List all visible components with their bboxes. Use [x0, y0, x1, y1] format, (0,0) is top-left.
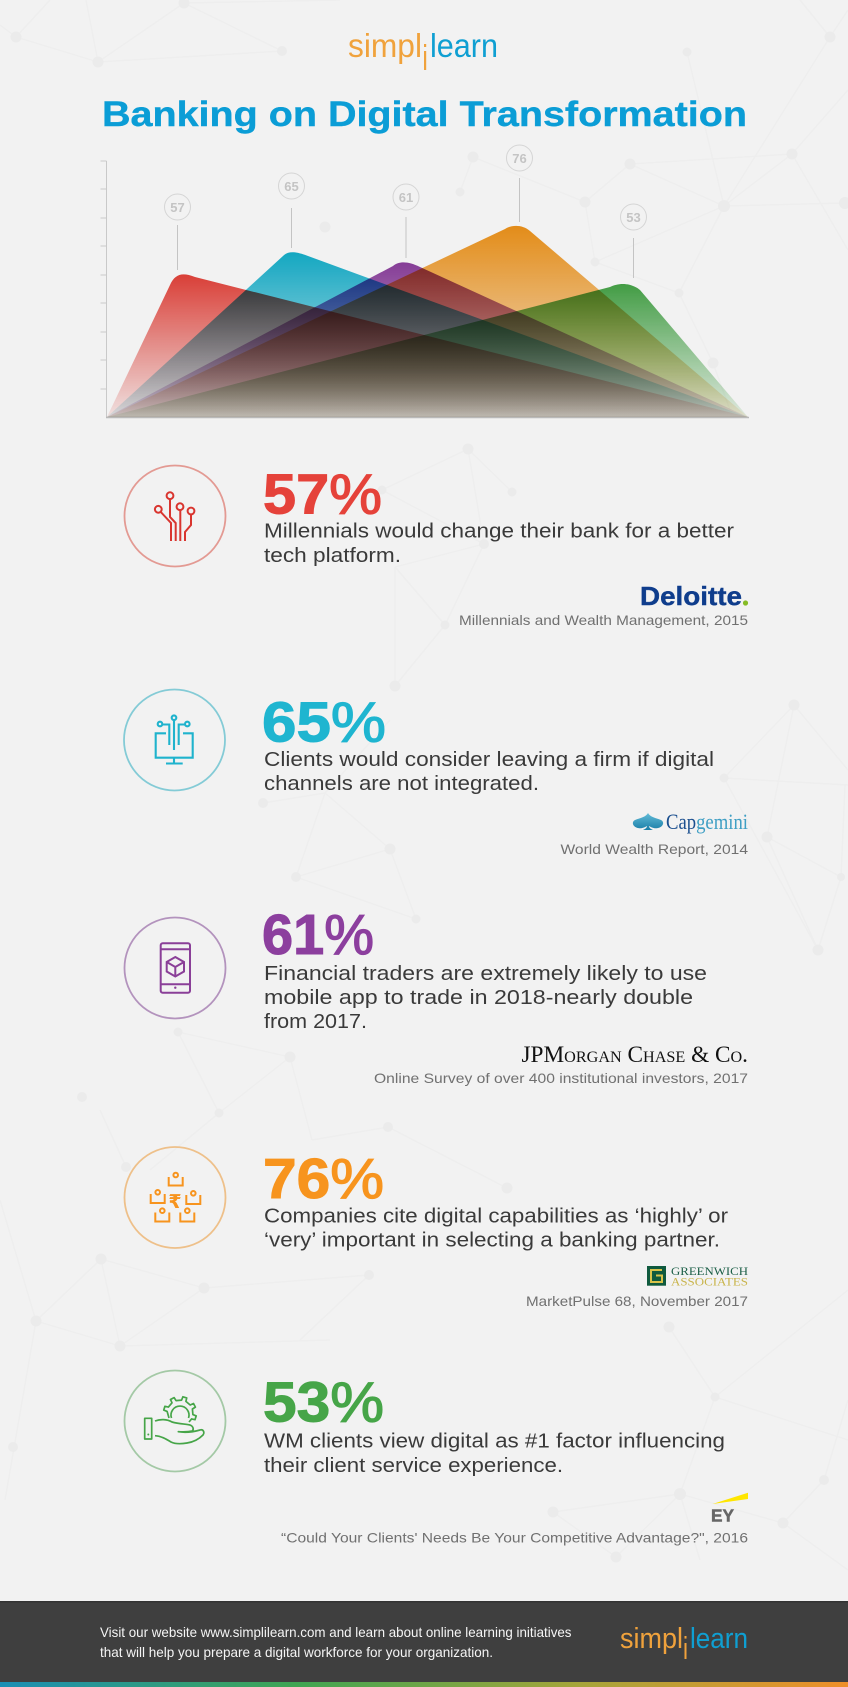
logo: Deloitte: Deloitte: [640, 581, 742, 611]
stat value: 61%: [262, 903, 374, 967]
footer gradient strip: [0, 1682, 848, 1687]
logo: Greenwich Associates: [647, 1264, 748, 1288]
footer text: [100, 1624, 572, 1660]
description: [264, 1206, 728, 1252]
icon: circuit in circle: [124, 466, 226, 566]
source: “Could Your Clients' Needs Be Your Competitive Advantage?", 2016: [281, 1530, 748, 1546]
icon: people around rupee: [124, 1147, 226, 1248]
panel: 65 percent stat: [124, 690, 748, 857]
description: [264, 1430, 725, 1477]
footer text: Visit our website www.simplilearn.com and learn about online learning initiatives: [100, 1624, 572, 1640]
description: tech platform.: [264, 545, 401, 567]
description: Clients would consider leaving a firm if digital: [264, 749, 714, 771]
stat value: 76%: [263, 1147, 384, 1211]
series: 65 cyan: [107, 252, 748, 417]
logo: simplilearn header: simpl: [348, 27, 422, 64]
panel: 53 percent stat: [124, 1370, 748, 1546]
panel: 61 percent stat: [124, 903, 748, 1086]
description: their client service experience.: [264, 1455, 563, 1477]
source: World Wealth Report, 2014: [560, 841, 748, 857]
panel: 57 percent stat: [124, 462, 748, 628]
footer: [0, 1601, 848, 1687]
series: 57 red: [107, 274, 748, 417]
data label: 57: [164, 194, 190, 270]
description: mobile app to trade in 2018-nearly double: [264, 987, 693, 1009]
description: channels are not integrated.: [264, 773, 539, 795]
series: 76 orange: [107, 226, 748, 417]
description: Financial traders are extremely likely to use: [264, 963, 707, 985]
series: 61 purple: [107, 262, 748, 417]
logo: simplilearn footer: [620, 1623, 748, 1659]
source: Online Survey of over 400 institutional investors, 2017: [374, 1070, 748, 1086]
logo: simplilearn header: [348, 27, 498, 70]
logo: Greenwich Associates: ASSOCIATES: [671, 1274, 748, 1288]
icon: phone with cube: [124, 918, 226, 1018]
logo: JPMorgan Chase & Co.: JPMorgan Chase & Co.: [522, 1042, 748, 1067]
stat value: 57%: [263, 462, 382, 526]
data label: 53: [620, 204, 646, 278]
logo: EY: EY: [711, 1506, 734, 1526]
data label: 61: 61: [399, 190, 413, 205]
description: Companies cite digital capabilities as ‘highly’ or: [264, 1206, 728, 1228]
description: from 2017.: [264, 1011, 367, 1033]
source: MarketPulse 68, November 2017: [526, 1293, 748, 1309]
chart: overlapping mountain area chart: [100, 145, 749, 418]
data label: 53: 53: [626, 210, 641, 225]
footer text: that will help you prepare a digital workforce for your organization.: [100, 1644, 493, 1660]
logo: simplilearn footer: simpl: [620, 1623, 683, 1655]
icon: hand holding gear: [124, 1370, 226, 1472]
title: Banking on Digital Transformation: [102, 95, 747, 134]
stat value: 65%: [262, 690, 386, 754]
panel: 76 percent stat: [124, 1147, 748, 1309]
icon: monitor with circuit: [124, 690, 225, 790]
icon: people around rupee: ₹: [168, 1191, 182, 1213]
data label: 76: 76: [512, 151, 527, 166]
logo: EY: [711, 1493, 748, 1526]
logo: Capgemini: [633, 809, 748, 834]
description: ‘very’ important in selecting a banking partner.: [264, 1230, 720, 1252]
logo: Greenwich Associates: GREENWICH: [671, 1264, 748, 1278]
data label: 61: [393, 184, 419, 258]
data label: 65: [278, 173, 304, 248]
logo: Capgemini: Capgemini: [666, 809, 748, 834]
logo: simplilearn footer: learn: [690, 1623, 748, 1655]
data label: 57: 57: [170, 200, 185, 215]
description: [264, 520, 734, 567]
logo: simplilearn header: learn: [430, 27, 498, 64]
series: 53 green: [107, 284, 748, 417]
data label: 76: [506, 145, 532, 222]
description: [264, 963, 707, 1033]
description: [264, 749, 714, 795]
description: WM clients view digital as #1 factor influencing: [264, 1430, 725, 1452]
stat value: 53%: [263, 1371, 384, 1435]
chart axis: [100, 161, 749, 418]
data label: 65: 65: [284, 179, 299, 194]
description: Millennials would change their bank for a better: [264, 520, 734, 542]
source: Millennials and Wealth Management, 2015: [459, 612, 748, 628]
